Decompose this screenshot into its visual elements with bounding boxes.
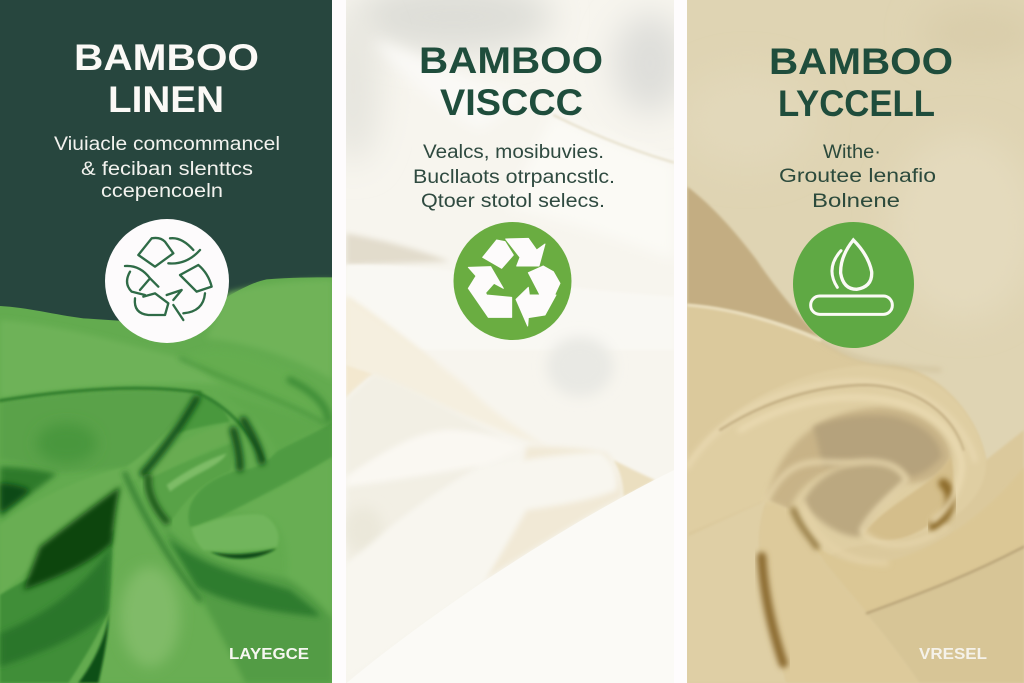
text block: lyocell description: Groutee lenafio <box>779 166 936 187</box>
text block: viscose description: Vealcs, mosibuvies. <box>423 142 604 163</box>
text block: viscose description: Bucllaots otrpancstlc. <box>413 167 615 188</box>
heading: bamboo lyocell: BAMBOO <box>769 41 953 82</box>
fabric: green swirl <box>0 277 332 683</box>
panel: bamboo linen <box>0 0 332 683</box>
text block: linen description: & feciban slenttcs <box>81 159 253 180</box>
icon: solid recycling symbol <box>454 222 572 340</box>
label: layegce: LAYEGCE <box>229 646 309 663</box>
heading: bamboo viscose <box>422 47 602 116</box>
heading: bamboo lyocell: LYCCELL <box>778 83 935 124</box>
text block: viscose description <box>413 142 615 212</box>
fabric: beige swirl <box>687 150 1024 683</box>
label: vresel: VRESEL <box>919 646 987 663</box>
heading: bamboo linen: LINEN <box>108 79 224 120</box>
text block: lyocell description: Bolnene <box>812 191 900 212</box>
text block: lyocell description: Withe· <box>823 142 881 163</box>
fabric: white folds <box>346 0 674 576</box>
panel: bamboo viscose <box>327 0 687 683</box>
text block: viscose description: Qtoer stotol selecs. <box>421 191 605 212</box>
text block: linen description: Viuiacle comcommancel <box>54 134 280 155</box>
heading: bamboo viscose: VISCCC <box>440 82 583 123</box>
heading: bamboo viscose: BAMBOO <box>419 40 603 81</box>
text block: linen description: ccepencoeln <box>101 181 223 202</box>
icon: water drop on pad <box>793 222 914 348</box>
heading: bamboo lyocell <box>772 48 952 116</box>
panel: bamboo lyocell <box>680 0 1024 683</box>
icon: outlined recycling symbol <box>105 219 229 343</box>
text block: lyocell description <box>780 144 936 207</box>
text block: linen description <box>54 134 280 202</box>
heading: bamboo linen <box>76 44 258 112</box>
heading: bamboo linen: BAMBOO <box>74 37 259 78</box>
